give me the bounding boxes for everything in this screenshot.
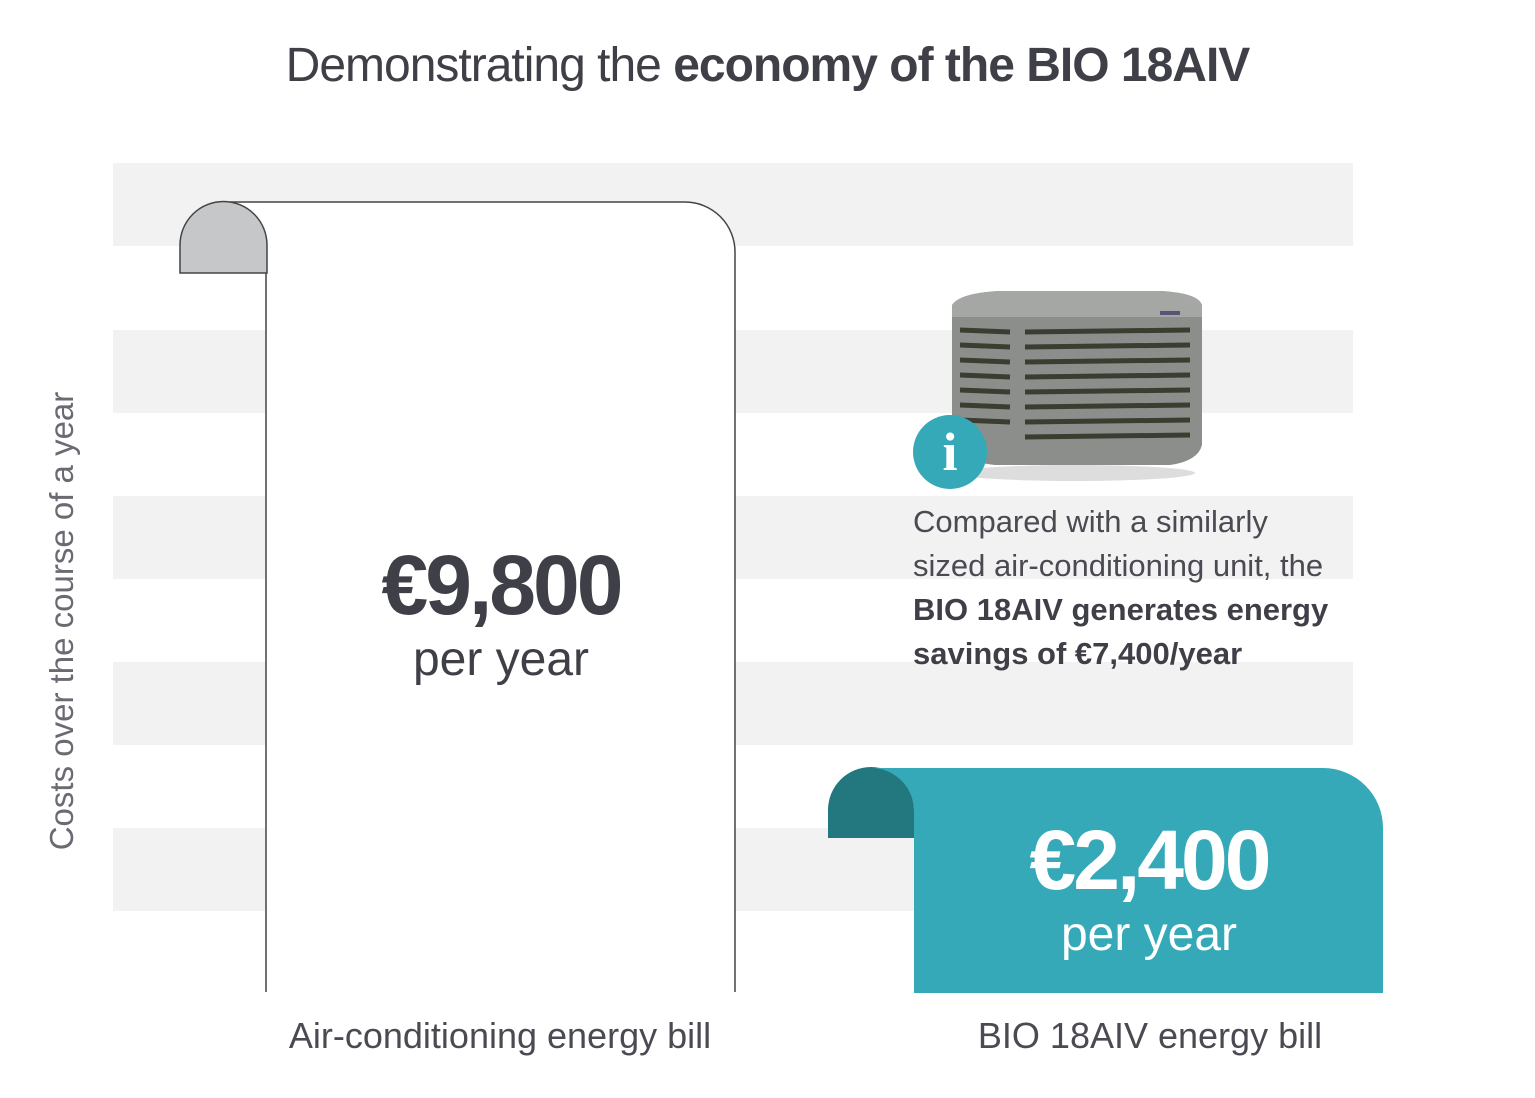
y-axis label: Costs over the course of a year bbox=[43, 392, 80, 850]
callout text: sized air-conditioning unit, the bbox=[913, 548, 1323, 583]
value: 9800: per year bbox=[413, 633, 589, 686]
callout text bbox=[913, 504, 1328, 671]
callout text: Compared with a similarly bbox=[913, 504, 1268, 539]
icon: cooler unit bbox=[952, 291, 1202, 481]
value: 9800 bbox=[382, 538, 620, 686]
title: Demonstrating the economy of the BIO 18AIV bbox=[286, 39, 1249, 92]
icon: info: i bbox=[942, 422, 958, 482]
value: 2400: per year bbox=[1061, 908, 1237, 961]
callout text: BIO 18AIV generates energy bbox=[913, 592, 1328, 627]
value: 2400 bbox=[1030, 813, 1268, 961]
label: BIO 18AIV: BIO 18AIV energy bill bbox=[978, 1015, 1322, 1056]
value: 9800: €9,800 bbox=[382, 538, 620, 632]
label: air-conditioning: Air-conditioning energy bill bbox=[289, 1015, 711, 1056]
callout text: savings of €7,400/year bbox=[913, 636, 1242, 671]
icon: info bbox=[913, 415, 987, 489]
value: 2400: €2,400 bbox=[1030, 813, 1268, 907]
